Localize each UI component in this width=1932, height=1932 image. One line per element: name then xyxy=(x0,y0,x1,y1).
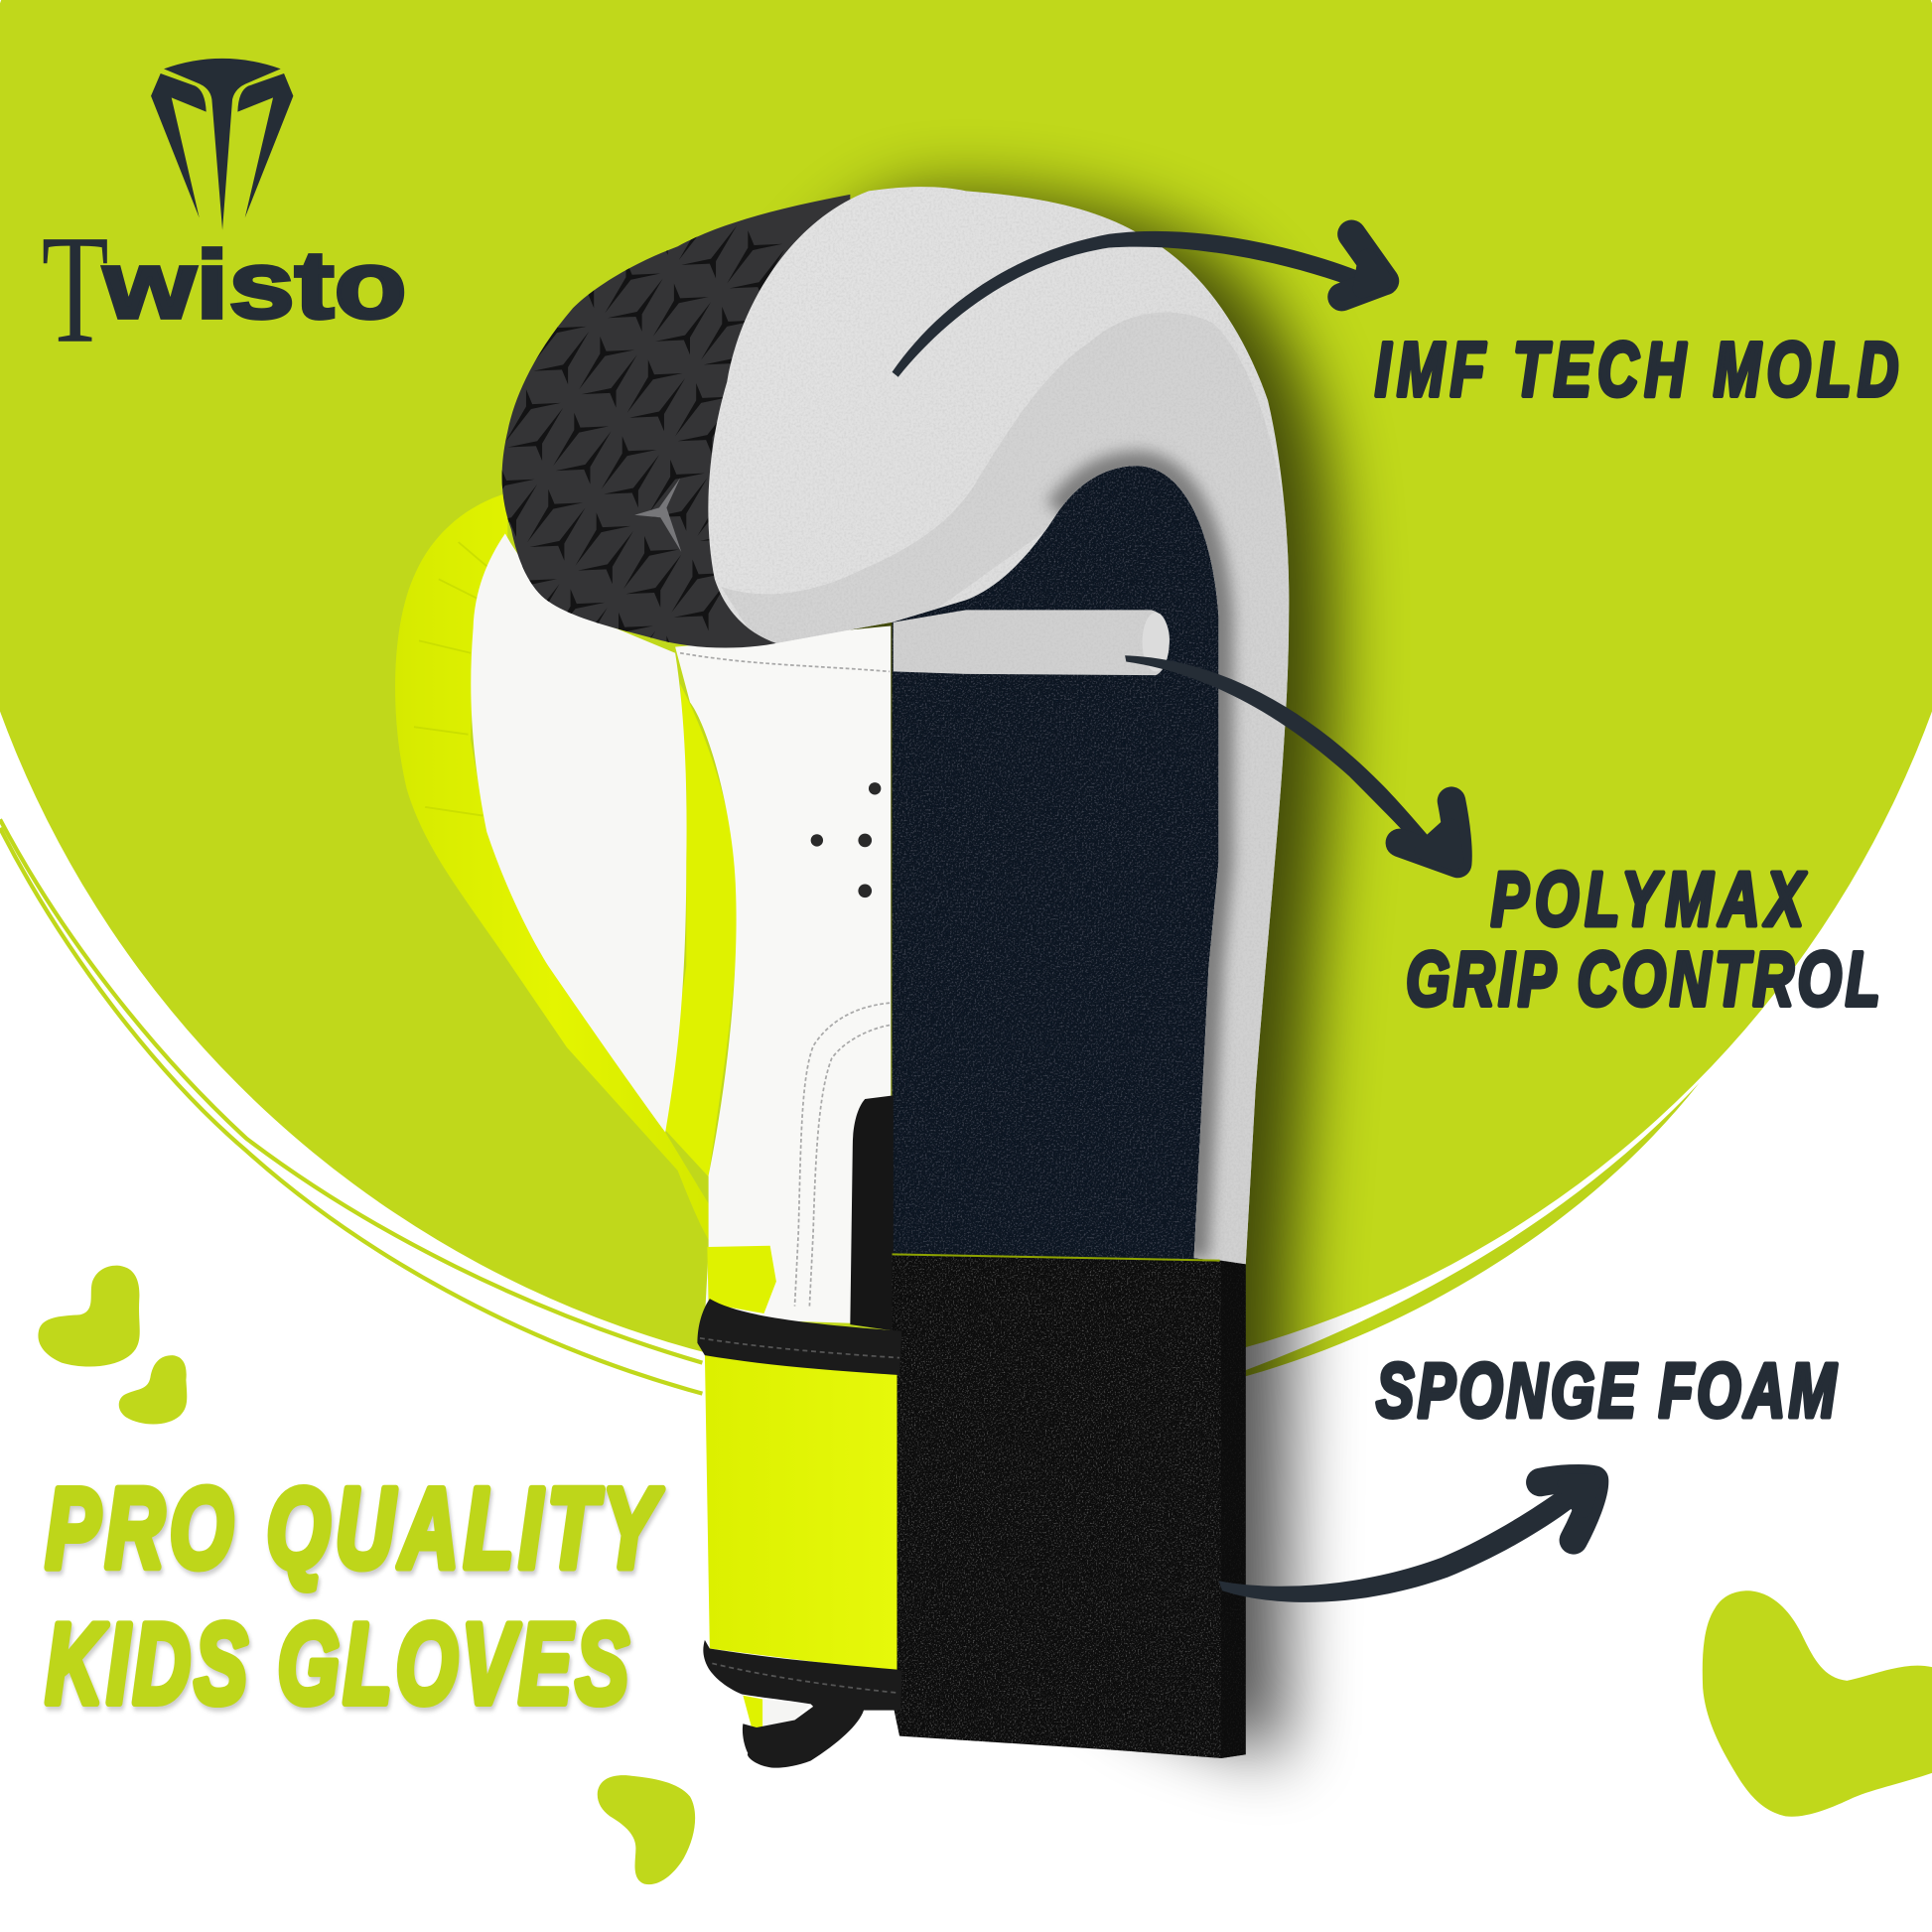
headline: Pro Quality Kids Gloves: KIDS GLOVES xyxy=(46,1600,628,1726)
glove: yellow wrist cuff xyxy=(705,1353,897,1672)
label: Polymax Grip Control: POLYMAX xyxy=(1491,858,1807,942)
glove: yellow inner band xyxy=(663,684,737,1176)
glove cast shadow xyxy=(737,195,1334,1760)
headline: Pro Quality Kids Gloves xyxy=(46,1465,663,1726)
glove: thumb rim, yellow xyxy=(395,492,715,1249)
glove: foam shell (IMF tech mold) xyxy=(708,187,1307,1282)
logo: Twisto xyxy=(42,59,407,375)
arrow: polymax grip control xyxy=(1125,655,1458,868)
logo wordmark xyxy=(42,204,407,375)
glove: polymax grip bar xyxy=(894,610,1170,675)
boxing glove xyxy=(395,184,1307,1768)
label: Polymax Grip Control: GRIP CONTROL xyxy=(1406,938,1880,1023)
label: Polymax Grip Control xyxy=(1406,858,1880,1023)
label: Sponge Foam: SPONGE FOAM xyxy=(1376,1349,1838,1434)
highlighted star on cap xyxy=(634,479,681,552)
glove: black piping at palm xyxy=(850,1095,894,1330)
glove: ventilation holes xyxy=(811,782,881,897)
glove: sponge foam block xyxy=(893,1254,1246,1758)
glove: white thumb padding xyxy=(471,533,687,1133)
headline: Pro Quality Kids Gloves: PRO QUALITY xyxy=(46,1465,663,1592)
logo helmet icon xyxy=(151,59,293,230)
logo wordmark: T xyxy=(42,204,109,375)
glove: white palm strip xyxy=(675,625,891,1324)
decorative heart: left large xyxy=(38,1266,140,1367)
glove: textured black knuckle cap xyxy=(502,195,850,647)
arrow: IMF tech mold xyxy=(893,231,1385,377)
green circle backdrop xyxy=(0,0,1932,1386)
glove: inner fabric lining xyxy=(893,444,1238,1269)
label: IMF Tech Mold: IMF TECH MOLD xyxy=(1375,328,1898,412)
glove: upper cuff binding xyxy=(697,1299,901,1375)
glove: strap loop and lower edge xyxy=(703,1640,901,1768)
arrow: sponge foam xyxy=(1218,1472,1596,1602)
glove: thumb wrinkles xyxy=(414,542,490,816)
decorative heart: bottom right xyxy=(1703,1590,1932,1817)
logo wordmark: wisto xyxy=(102,230,407,339)
right curved accent crescent xyxy=(1246,1083,1699,1376)
glove: thumb-side seam patch xyxy=(707,1246,776,1313)
glove: palm stitching xyxy=(680,653,890,1307)
decorative heart: left small xyxy=(119,1355,187,1425)
left curved accent lines xyxy=(0,819,702,1394)
decorative heart: bottom centre xyxy=(598,1775,695,1884)
